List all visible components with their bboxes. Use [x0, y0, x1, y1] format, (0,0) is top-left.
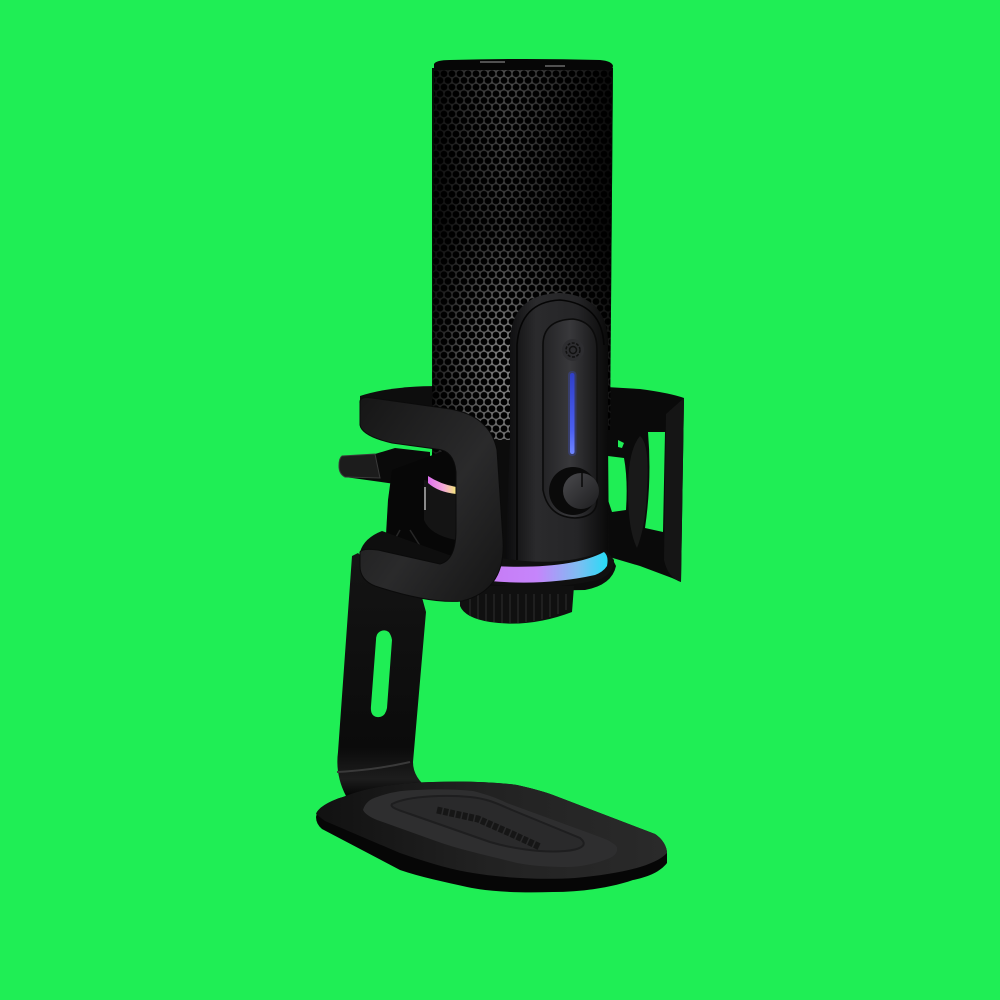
cage clip [628, 436, 648, 548]
cage window upper [645, 432, 665, 532]
inner control strip [543, 319, 597, 518]
microphone mesh body [432, 59, 613, 470]
lower clip inner wall [360, 531, 452, 570]
arm bend highlight [337, 762, 410, 772]
inner light ring [428, 476, 456, 494]
front shock mount clip [360, 398, 503, 601]
stand arm with slot [337, 553, 430, 796]
blue level indicator [568, 371, 576, 456]
shock mount rear cage [606, 387, 684, 582]
microphone control panel [505, 293, 608, 570]
lower microphone body behind clip [460, 440, 616, 592]
cage window small [618, 440, 624, 448]
mute button icon [562, 339, 584, 361]
top rim [434, 59, 613, 70]
suspension struts [390, 530, 424, 552]
cage window lower [608, 456, 627, 512]
ribbed threaded bottom [460, 586, 574, 624]
desk stand base [316, 782, 667, 892]
inner mic core seen through clip [385, 445, 460, 565]
rubber pad [363, 789, 617, 867]
side USB connector [339, 448, 430, 484]
embossed logo [437, 810, 540, 847]
volume knob [549, 467, 599, 515]
RGB light ring [490, 550, 614, 587]
core highlight [424, 487, 426, 510]
rear band of shock mount [360, 386, 440, 410]
